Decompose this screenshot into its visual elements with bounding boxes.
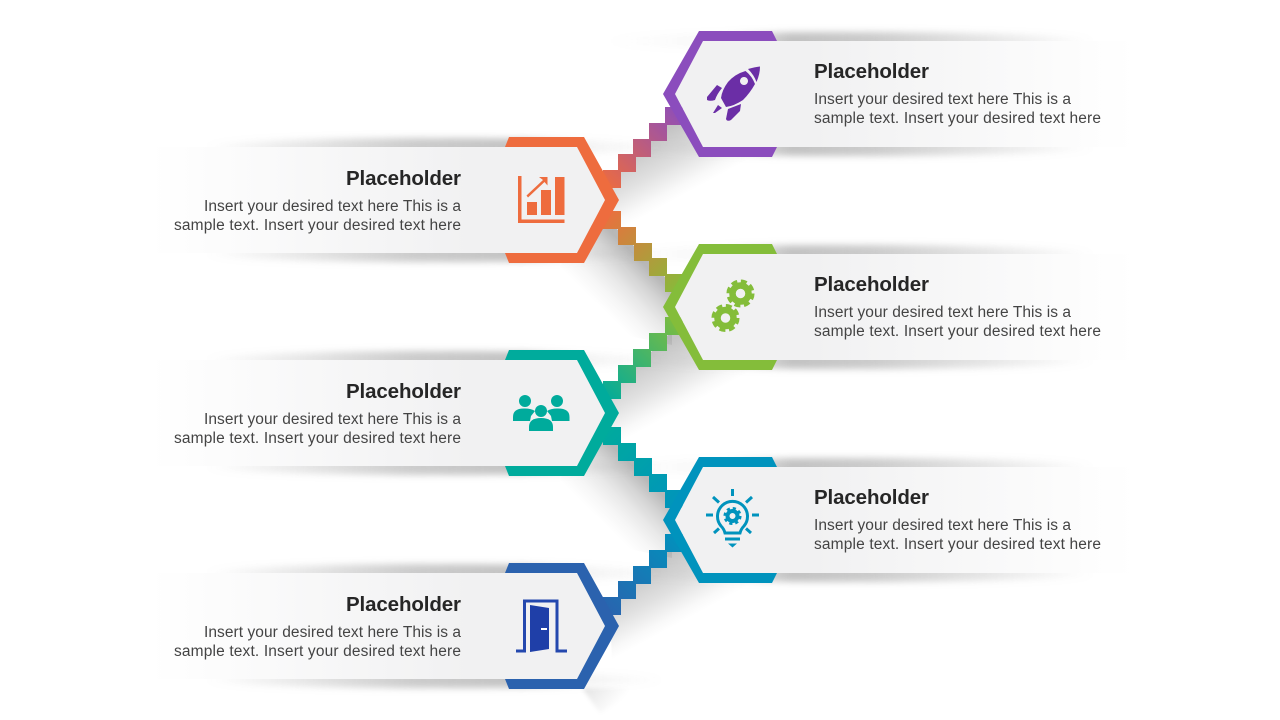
staircase connector: purple to orange <box>603 107 683 188</box>
text block <box>174 411 461 447</box>
text block <box>814 304 1101 340</box>
icon: bar chart <box>518 176 564 223</box>
panel: purple rocket <box>663 31 1135 157</box>
heading: Placeholder <box>346 380 461 403</box>
icon: open door <box>516 600 567 652</box>
text block: Insert your desired text here This is a <box>204 198 461 215</box>
icon: team of people <box>513 395 570 431</box>
panel: teal people <box>150 350 619 476</box>
text block <box>814 517 1101 553</box>
text block: Insert your desired text here This is a <box>814 517 1071 534</box>
soft shadows behind the panels and stairs <box>205 32 1095 713</box>
text block: Insert your desired text here This is a <box>814 91 1071 108</box>
text block <box>814 91 1101 127</box>
text block: sample text. Insert your desired text here <box>174 430 461 447</box>
heading: Placeholder <box>814 486 929 509</box>
icon: light bulb <box>706 489 759 548</box>
text block: sample text. Insert your desired text here <box>814 323 1101 340</box>
text block: Insert your desired text here This is a <box>814 304 1071 321</box>
heading: Placeholder <box>346 593 461 616</box>
text block: sample text. Insert your desired text here <box>174 217 461 234</box>
heading: Placeholder <box>346 167 461 190</box>
staircase connector: blue to dark blue <box>603 534 683 615</box>
staircase connector: green to teal <box>603 317 683 399</box>
heading: Placeholder <box>814 273 929 296</box>
text block: sample text. Insert your desired text here <box>814 110 1101 127</box>
text block: Insert your desired text here This is a <box>204 624 461 641</box>
icon: gears <box>713 281 753 330</box>
staircase connector: orange to green <box>603 211 683 292</box>
heading: Placeholder <box>814 60 929 83</box>
text block: sample text. Insert your desired text here <box>814 536 1101 553</box>
staircase connector: teal to blue <box>603 427 683 508</box>
panel: orange chart <box>150 137 619 263</box>
text block <box>174 624 461 660</box>
text block: Insert your desired text here This is a <box>204 411 461 428</box>
panel: green gears <box>663 244 1135 370</box>
text block <box>174 198 461 234</box>
panel: blue light bulb <box>663 457 1135 583</box>
icon: rocket <box>707 66 760 121</box>
panel: dark blue door <box>150 563 619 689</box>
text block: sample text. Insert your desired text here <box>174 643 461 660</box>
